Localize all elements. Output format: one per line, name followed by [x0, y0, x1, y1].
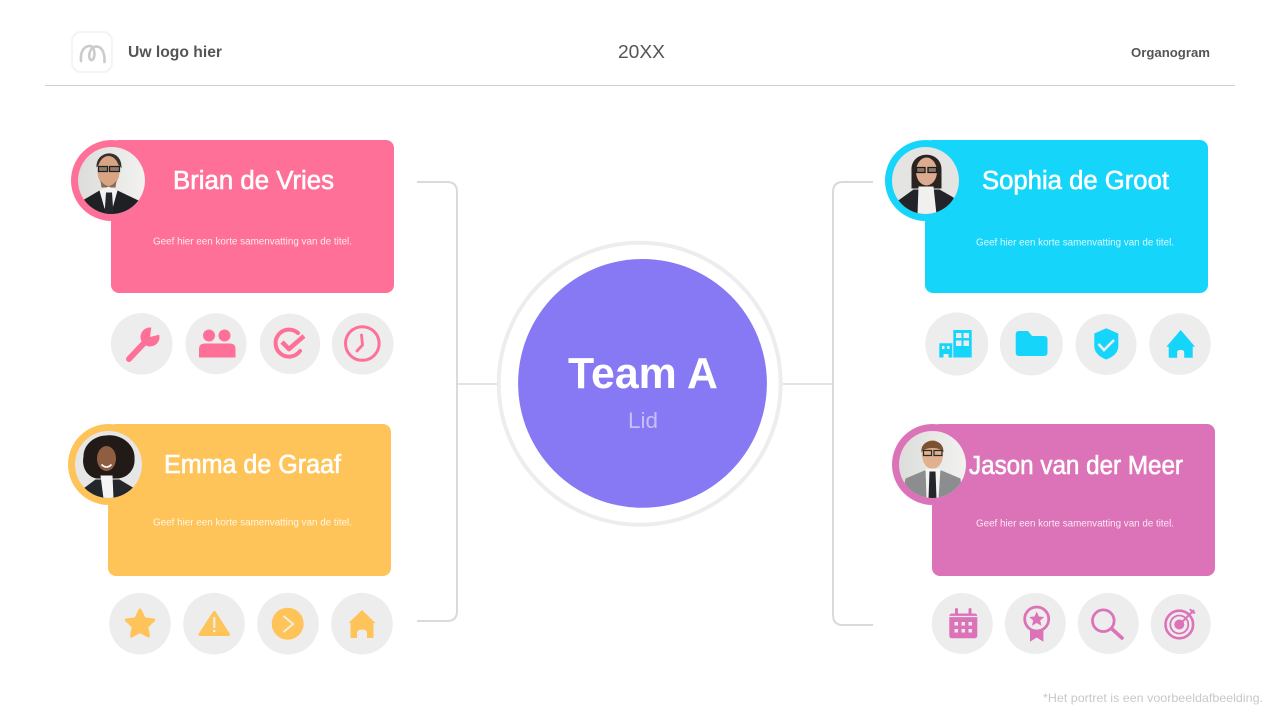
icon row: Brian — [111, 313, 394, 375]
year: 20XX — [618, 42, 665, 62]
panel: Sophia de Groot — [885, 140, 1208, 293]
summary: Geef hier een korte samenvatting van de titel. — [153, 236, 352, 248]
name: Jason van der Meer — [969, 452, 1183, 480]
panel: Emma de Graaf — [68, 424, 391, 576]
page title: Organogram — [1131, 45, 1210, 60]
icon: house — [331, 593, 393, 654]
summary: Geef hier een korte samenvatting van de titel. — [976, 238, 1174, 248]
summary: Geef hier een korte samenvatting van de titel. — [153, 518, 352, 528]
panel: Brian de Vries — [71, 140, 394, 293]
icon row: Emma — [109, 593, 393, 654]
icon: warning — [183, 593, 245, 654]
icon: star — [109, 593, 171, 654]
icon: house — [1149, 313, 1211, 375]
icon: wrench — [111, 313, 172, 375]
icon: calendar — [932, 593, 993, 654]
team name: Team A — [568, 349, 718, 398]
icon: folder — [1000, 312, 1063, 376]
portrait: Jason — [898, 430, 966, 498]
team role: Lid — [628, 408, 658, 433]
icon: check badge — [260, 314, 320, 374]
name: Brian de Vries — [173, 167, 334, 195]
logo tile — [72, 32, 112, 72]
icon: target — [1151, 594, 1211, 654]
header — [72, 32, 1210, 72]
logo text: Uw logo hier — [128, 44, 222, 61]
portrait: Brian — [78, 146, 146, 214]
icon row: Jason — [932, 593, 1211, 654]
name: Emma de Graaf — [164, 451, 342, 479]
central node: Team A — [499, 243, 781, 525]
icon: buildings — [925, 312, 988, 376]
connector: right bracket — [783, 182, 873, 625]
portrait: Sophia — [892, 146, 960, 214]
connector: left bracket — [417, 182, 497, 621]
portrait: Emma — [74, 430, 142, 498]
panel: Jason van der Meer — [892, 424, 1215, 576]
icon: arrow right — [257, 593, 319, 654]
icon row: Sophia — [925, 312, 1211, 376]
summary: Geef hier een korte samenvatting van de titel. — [976, 518, 1174, 530]
icon: shield check — [1076, 314, 1136, 375]
icon: people — [186, 313, 246, 374]
name: Sophia de Groot — [982, 167, 1169, 195]
icon: clock — [332, 313, 394, 375]
icon: award ribbon — [1005, 593, 1066, 654]
footnote: *Het portret is een voorbeeldafbeelding. — [1043, 691, 1263, 705]
icon: magnifier — [1078, 593, 1139, 654]
